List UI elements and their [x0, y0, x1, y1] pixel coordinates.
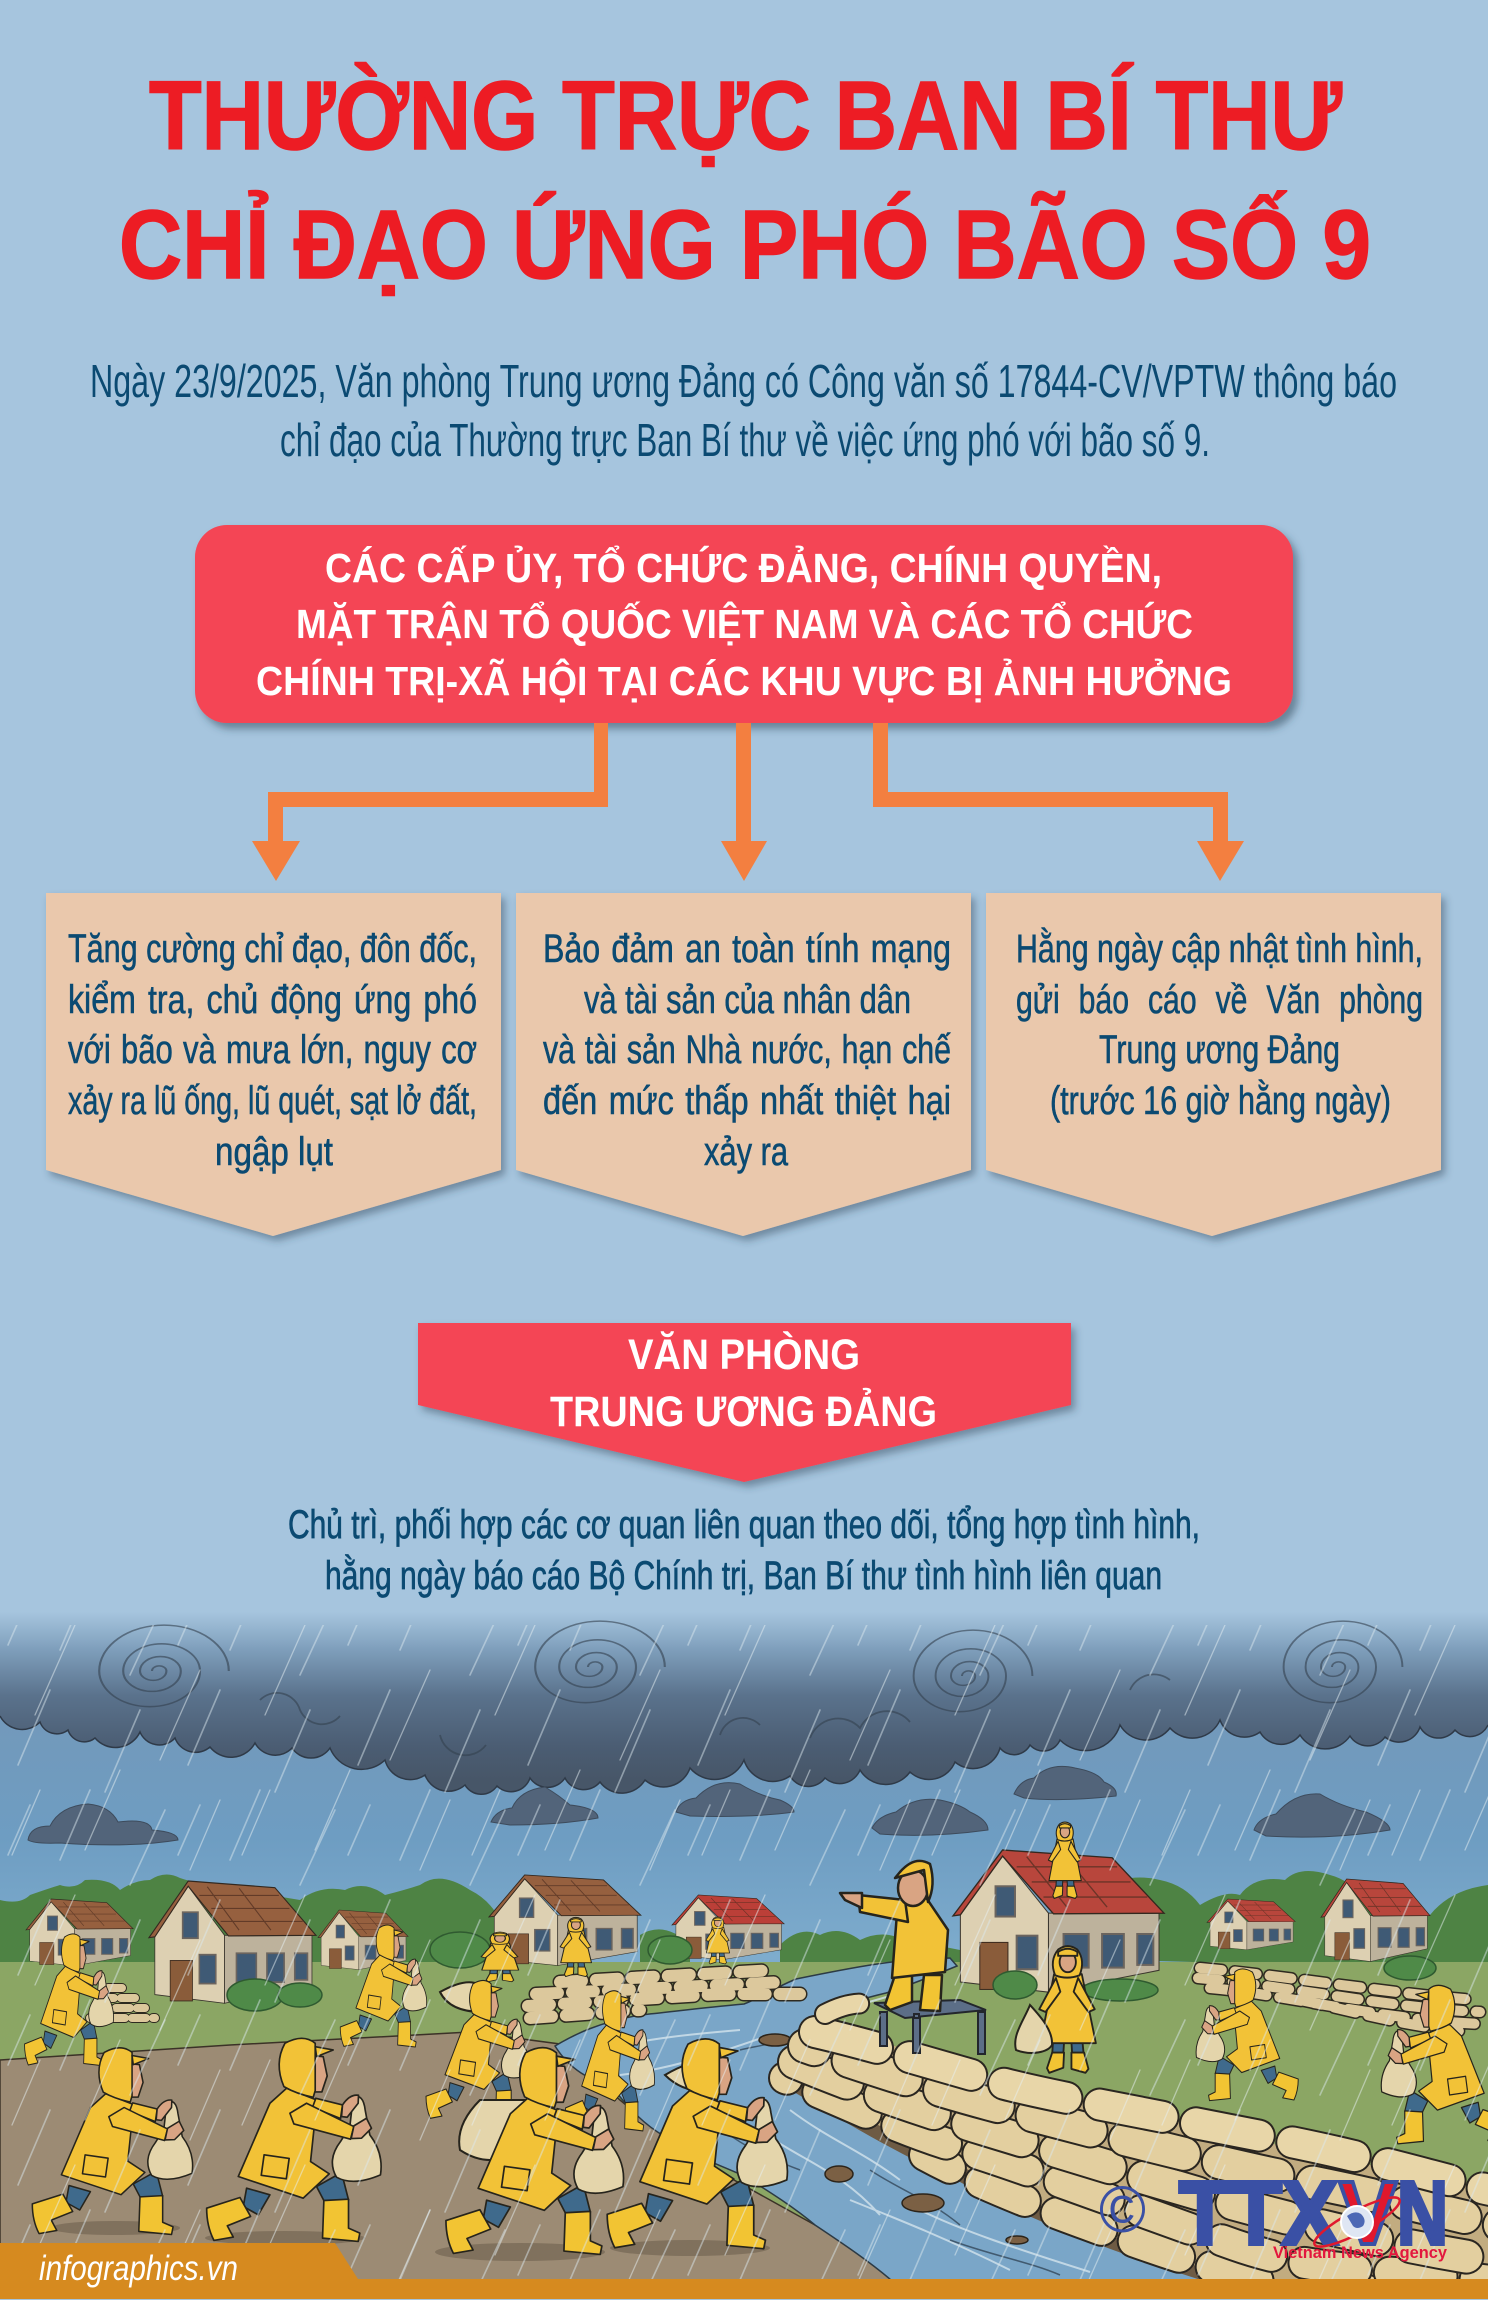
panel: office banner: TRUNG ƯƠNG ĐẢNG: [550, 1387, 937, 1436]
bushes: [227, 1932, 1436, 2011]
small clouds: [28, 1766, 1390, 1845]
panel: card 2: đến mức thấp nhất thiệt hại: [543, 1079, 951, 1123]
arrow: right: [873, 723, 1244, 881]
panel: card 1: kiểm tra, chủ động ứng phó: [68, 978, 477, 1022]
arrow: left: [252, 723, 608, 881]
panel: card 2: và tài sản của nhân dân: [584, 978, 911, 1022]
footer bar: [0, 2243, 1488, 2299]
main sandbag levee: [782, 2003, 1488, 2296]
panel: addressees header: [195, 525, 1293, 723]
panel: card 2: [516, 893, 971, 1236]
arrow: centre: [721, 723, 767, 881]
panel: card 1: với bão và mưa lớn, nguy cơ: [68, 1028, 477, 1072]
footer source text: infographics.vn: [39, 2249, 238, 2288]
panel: card 2: Bảo đảm an toàn tính mạng: [543, 927, 951, 971]
panel: card 1: ngập lụt: [215, 1130, 333, 1174]
road: [0, 2032, 900, 2280]
panel: addressees header: CÁC CẤP ỦY, TỔ CHỨC ĐẢNG, CHÍNH QUYỀN,: [325, 544, 1162, 591]
river: [554, 1957, 1198, 2279]
rain: [0, 1625, 1488, 2280]
title: CHỈ ĐẠO ỨNG PHÓ BÃO SỐ 9: [119, 190, 1371, 299]
workers: background: [481, 1822, 1081, 1982]
intro text: [90, 355, 1397, 466]
sky: [0, 1718, 1488, 1962]
logo: TTXVN: [1099, 2164, 1448, 2264]
storm cloud bank: [0, 1610, 1488, 1794]
panel: office banner: [418, 1323, 1071, 1482]
panel: card 1: Tăng cường chỉ đạo, đôn đốc,: [68, 927, 477, 971]
panel: card 3: (trước 16 giờ hằng ngày): [1050, 1078, 1391, 1123]
panel: card 1: [46, 893, 501, 1236]
worker: standing with sack: [1015, 1946, 1096, 2073]
panel: card 3: [986, 893, 1441, 1236]
illustration: storm scene: [0, 1610, 1488, 2296]
panel: card 2: và tài sản Nhà nước, hạn chế: [543, 1028, 951, 1072]
far sandbag walls: [90, 1968, 1482, 2032]
title: [119, 61, 1371, 299]
panel: addressees header: CHÍNH TRỊ-XÃ HỘI TẠI CÁC KHU VỰC BỊ ẢNH HƯỞNG: [256, 658, 1232, 704]
office note text: hằng ngày báo cáo Bộ Chính trị, Ban Bí thư tình hình liên quan: [325, 1553, 1162, 1598]
logo: TTXVN: TTX: [1179, 2164, 1338, 2264]
logo: TTXVN: ©: [1099, 2172, 1146, 2246]
worker: pointing supervisor: [840, 1861, 948, 2011]
logo: TTXVN: Vietnam News Agency: [1273, 2243, 1448, 2262]
office note text: [288, 1503, 1200, 1598]
logo: TTXVN: V: [1339, 2164, 1397, 2264]
panel: addressees header: MẶT TRẬN TỔ QUỐC VIỆT NAM VÀ CÁC TỔ CHỨC: [296, 600, 1193, 647]
panel: card 3: Trung ương Đảng: [1099, 1028, 1340, 1072]
panel: card 1: xảy ra lũ ống, lũ quét, sạt lở đất,: [68, 1079, 477, 1123]
workers: running with sacks: [24, 1925, 1488, 2261]
panel: office banner: VĂN PHÒNG: [628, 1330, 860, 1379]
platform table: [874, 2000, 986, 2054]
title: THƯỜNG TRỰC BAN BÍ THƯ: [149, 61, 1342, 170]
houses: [26, 1850, 1430, 2003]
grass field: [0, 1962, 1488, 2221]
logo: TTXVN: N: [1397, 2164, 1448, 2264]
tree line: [0, 1871, 1488, 1970]
office note text: Chủ trì, phối hợp các cơ quan liên quan theo dõi, tổng hợp tình hình,: [288, 1503, 1200, 1547]
panel: card 2: xảy ra: [704, 1130, 789, 1174]
